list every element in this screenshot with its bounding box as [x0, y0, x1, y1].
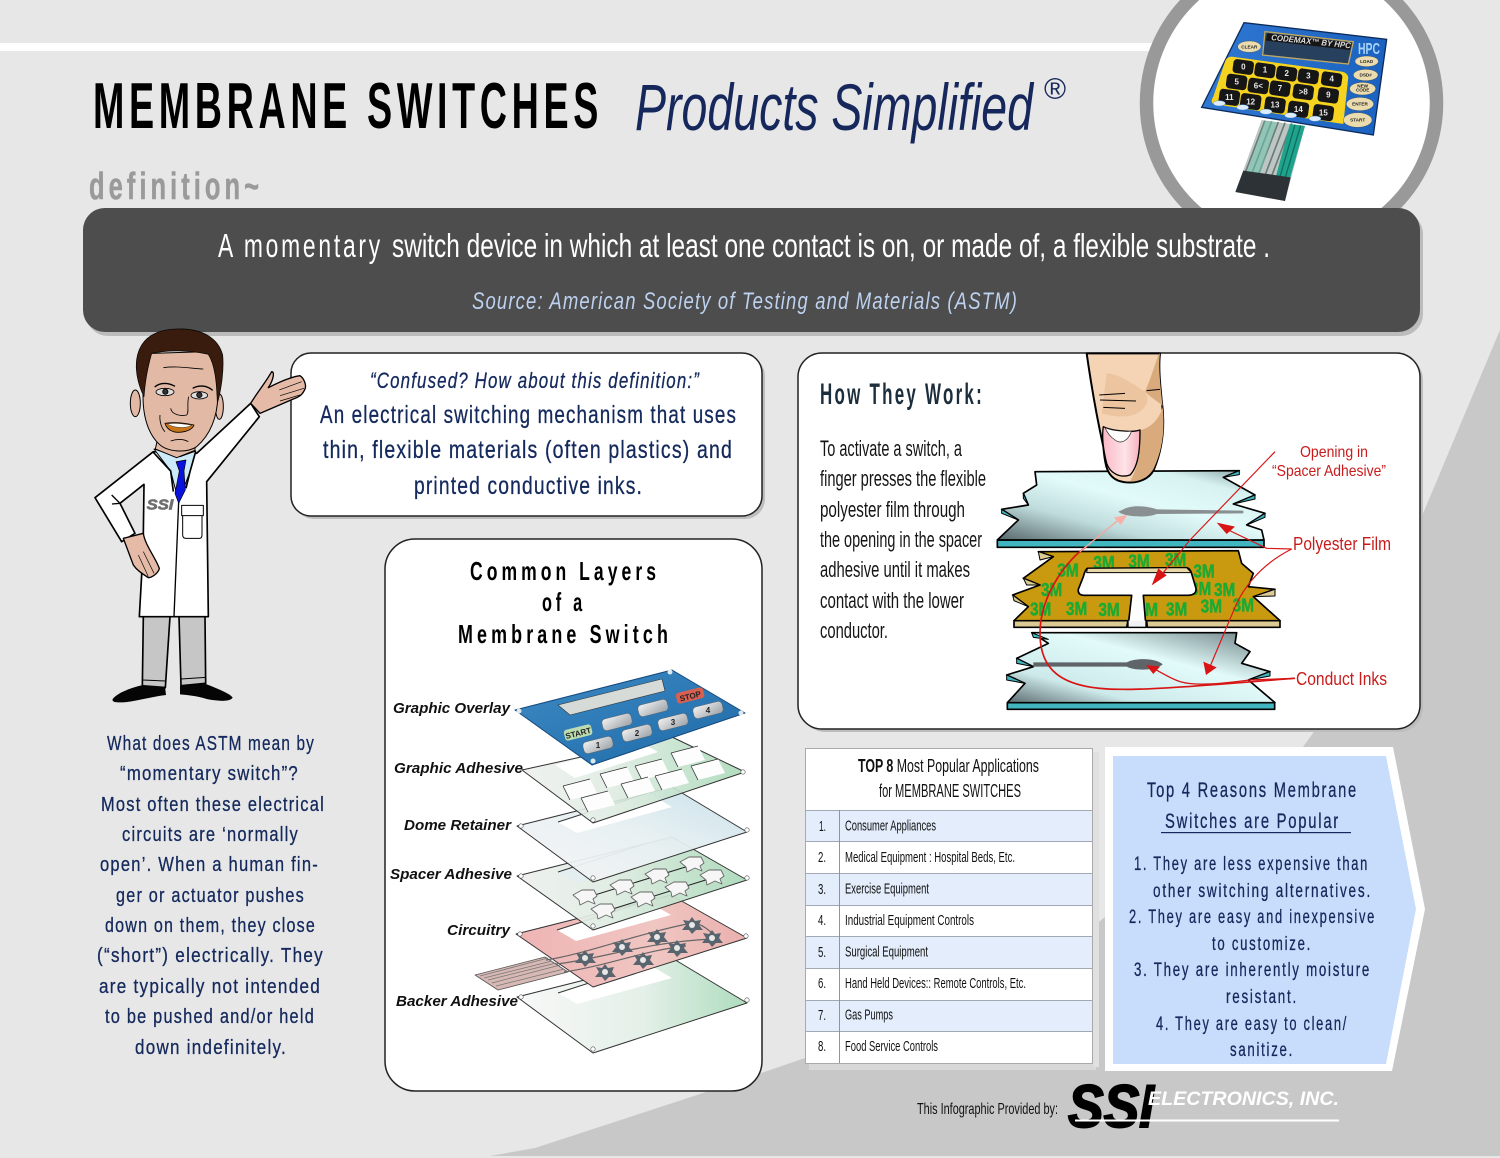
- footer credit: This Infographic Provided by:: [917, 1101, 1058, 1118]
- 3M repeated print: 3M: [1128, 550, 1150, 571]
- how they work body: the opening in the spacer: [820, 527, 982, 552]
- keypad membrane switch illustration: CLEAR: [1241, 44, 1258, 49]
- definition banner: [83, 208, 1423, 336]
- top white stripe: [0, 43, 1160, 51]
- 3M repeated print: 3M: [1098, 599, 1120, 620]
- SSI logo: SSI: [1068, 1073, 1155, 1140]
- layer: backer adhesive: [517, 958, 749, 1053]
- layers heading: Common Layers: [470, 556, 660, 586]
- callout body: [320, 401, 737, 500]
- 3M repeated print: 3M: [1190, 578, 1211, 599]
- reasons list: resistant.: [1226, 987, 1298, 1008]
- panel: top 4 reasons: [1105, 747, 1425, 1071]
- hands: [123, 372, 306, 578]
- table text: Exercise Equipment: [845, 880, 930, 898]
- definition text: [218, 227, 1270, 264]
- table text: 2.: [818, 849, 826, 866]
- panel: how they work: [798, 353, 1423, 732]
- reasons heading: [1147, 779, 1358, 833]
- layer: graphic overlay: [515, 670, 745, 765]
- 3M repeated print: 3M: [1165, 549, 1186, 570]
- callout body: thin, flexible materials (often plastics) and: [323, 436, 733, 464]
- coat pocket: [182, 505, 203, 538]
- background diagonal gray band: [490, 330, 1500, 1156]
- keypad membrane switch illustration: 4: [1329, 75, 1334, 84]
- 3M repeated print: 3M: [1193, 560, 1215, 581]
- red leader arrows: [1040, 452, 1295, 689]
- left explanatory text: “momentary switch”?: [120, 763, 299, 785]
- lab coat: [95, 403, 259, 617]
- keypad membrane switch illustration: NEW: [1357, 84, 1369, 89]
- necktie: [175, 460, 186, 503]
- table: top 8 applications: [806, 748, 1099, 1070]
- layers heading: [458, 556, 672, 649]
- lower polyester film: [1007, 633, 1275, 709]
- 3M repeated print: 3M: [1166, 598, 1187, 619]
- layer labels: Graphic Adhesive: [394, 760, 523, 777]
- reasons list: other switching alternatives.: [1153, 881, 1372, 902]
- spacer domes: [573, 857, 724, 919]
- reasons list: [1129, 854, 1376, 1061]
- layer: graphic overlay: 3: [671, 718, 676, 727]
- diagram labels: “Spacer Adhesive”: [1272, 463, 1386, 480]
- layer: dome retainer: [517, 787, 749, 882]
- how they work body: To activate a switch, a: [820, 436, 962, 461]
- table text: Medical Equipment : Hospital Beds, Etc.: [845, 849, 1015, 866]
- table text: Industrial Equipment Controls: [845, 912, 974, 929]
- 3M repeated print: [1030, 552, 1254, 616]
- layer: spacer adhesive: [517, 837, 749, 930]
- reasons list: to customize.: [1212, 934, 1312, 955]
- left explanatory text: down on them, they close: [105, 915, 316, 937]
- callout panel: simple definition: [291, 353, 765, 519]
- keypad membrane switch illustration: 3: [1306, 72, 1311, 81]
- diagram labels: [1272, 444, 1391, 689]
- source text: Source: American Society of Testing and Materials (ASTM): [472, 288, 1018, 315]
- facial features: [155, 367, 213, 442]
- switch diagram: [997, 353, 1295, 709]
- reasons heading: Switches are Popular: [1165, 810, 1340, 833]
- layers heading: Membrane Switch: [458, 619, 672, 649]
- keypad membrane switch illustration: [1202, 23, 1387, 201]
- keypad membrane switch illustration: 12: [1246, 97, 1256, 106]
- ears: [130, 390, 140, 417]
- spacer opening: [1078, 568, 1196, 627]
- fingernail: [1103, 427, 1140, 476]
- keypad membrane switch illustration: 7: [1278, 84, 1283, 93]
- 3M repeated print: 3M: [1233, 595, 1254, 616]
- layer labels: Circuitry: [447, 922, 511, 939]
- left explanatory text: What does ASTM mean by: [107, 733, 315, 755]
- keypad membrane switch illustration: 5: [1234, 77, 1239, 86]
- keypad membrane switch illustration: 2: [1284, 69, 1289, 78]
- table text: Consumer Appliances: [845, 818, 936, 834]
- table text: 3.: [818, 881, 826, 898]
- keypad membrane switch illustration: 14: [1294, 105, 1303, 114]
- shirt collar: [154, 449, 196, 502]
- top polyester film: [997, 471, 1265, 547]
- left explanatory text: (“short”) electrically. They: [97, 945, 324, 967]
- left explanatory text: are typically not intended: [99, 976, 321, 998]
- company name: ELECTRONICS, INC.: [1148, 1089, 1339, 1110]
- panel: common layers: [385, 539, 762, 1091]
- reasons list: sanitize.: [1230, 1040, 1294, 1061]
- table text: 5.: [818, 944, 826, 961]
- reasons list: 1. They are less expensive than: [1134, 854, 1369, 875]
- 3M repeated print: 3M: [1030, 598, 1051, 619]
- keypad membrane switch illustration: 11: [1225, 93, 1234, 102]
- trousers: [142, 617, 206, 688]
- layer labels: [390, 700, 523, 1010]
- layer: graphic overlay: 1: [596, 741, 601, 750]
- table text: Surgical Equipment: [845, 944, 929, 960]
- footer credit: [917, 1073, 1339, 1140]
- keypad membrane switch illustration: >8: [1299, 87, 1308, 96]
- keypad membrane switch illustration: START: [1350, 118, 1365, 123]
- how they work body: polyester film through: [820, 497, 965, 522]
- left explanatory text: Most often these electrical: [101, 794, 325, 816]
- how they work body: [820, 436, 986, 643]
- table text: 6.: [818, 975, 826, 992]
- 3M repeated print: 3M: [1201, 596, 1222, 617]
- subtitle: Products Simplified: [635, 70, 1035, 144]
- table text: 1.: [819, 818, 826, 835]
- keypad membrane switch illustration: DSD#: [1359, 73, 1372, 78]
- layer labels: Graphic Overlay: [393, 700, 511, 717]
- table text: Hand Held Devices:: Remote Controls, Etc.: [845, 975, 1026, 992]
- coat logo: SSI: [147, 497, 174, 513]
- left explanatory text: open’. When a human fin-: [100, 854, 319, 876]
- keypad membrane switch illustration: 15: [1319, 108, 1328, 117]
- reasons list: 2. They are easy and inexpensive: [1129, 907, 1376, 928]
- how they work heading: How They Work:: [820, 378, 984, 411]
- face: [143, 352, 218, 451]
- keypad keys: [1218, 59, 1343, 122]
- hair: [136, 329, 223, 403]
- table rows: [806, 810, 1092, 1063]
- finger: [1087, 353, 1164, 482]
- keypad membrane switch illustration: ENTER: [1352, 102, 1369, 107]
- reasons list: 4. They are easy to clean/: [1156, 1014, 1348, 1035]
- definition text: A momentary: [218, 227, 383, 264]
- table text: Gas Pumps: [845, 1006, 893, 1024]
- left explanatory text: circuits are ‘normally: [122, 824, 299, 846]
- layer: circuitry: [475, 895, 748, 990]
- keypad membrane switch illustration: 0: [1241, 62, 1246, 71]
- callout quote: “Confused? How about this definition:”: [370, 368, 700, 393]
- 3M repeated print: 3M: [1066, 598, 1087, 619]
- how they work body: adhesive until it makes: [820, 557, 970, 582]
- 3M repeated print: 3M: [1041, 579, 1062, 600]
- keypad membrane switch illustration: HPC: [1358, 41, 1380, 58]
- how they work body: finger presses the flexible: [820, 466, 986, 491]
- keypad membrane switch illustration: LOAD: [1360, 59, 1374, 64]
- how they work body: contact with the lower: [820, 588, 964, 613]
- table heading: TOP 8 Most Popular Applications: [858, 756, 1039, 776]
- 3M repeated print: 3M: [1093, 552, 1115, 573]
- shoes: [113, 684, 233, 702]
- cartoon engineer pointing: [95, 329, 306, 702]
- left explanatory text: ger or actuator pushes: [116, 885, 305, 907]
- table text: [818, 818, 1026, 1055]
- definition label: definition~: [89, 166, 263, 208]
- layer: graphic overlay: 4: [706, 706, 711, 715]
- registered mark: ®: [1044, 73, 1066, 106]
- layer: graphic overlay: START: [565, 726, 592, 741]
- 3M repeated print: 3M: [1137, 599, 1158, 620]
- diagram labels: Conduct Inks: [1296, 669, 1387, 689]
- layer: graphic overlay: 2: [635, 729, 640, 738]
- title: MEMBRANE SWITCHES: [93, 69, 603, 142]
- layer labels: Backer Adhesive: [396, 993, 518, 1010]
- left explanatory text: to be pushed and/or held: [105, 1006, 315, 1028]
- how they work body: conductor.: [820, 618, 888, 643]
- left explanatory text: down indefinitely.: [135, 1037, 287, 1059]
- layer: graphic overlay: STOP: [679, 689, 703, 703]
- spacer adhesive sheet: [1013, 549, 1280, 627]
- layers heading: of a: [542, 587, 586, 617]
- neck: [155, 438, 195, 458]
- callout body: An electrical switching mechanism that uses: [320, 401, 737, 429]
- table text: 8.: [818, 1038, 826, 1055]
- diagram labels: Opening in: [1300, 444, 1368, 461]
- 3M repeated print: 3M: [1214, 579, 1235, 600]
- left explanatory text: [97, 733, 325, 1059]
- layer labels: Dome Retainer: [404, 817, 512, 834]
- keypad membrane switch illustration: CODEMAX™ BY HPC: [1271, 32, 1352, 50]
- diagram labels: Polyester Film: [1293, 534, 1391, 554]
- keypad membrane switch illustration: 1: [1263, 66, 1268, 75]
- keypad membrane switch illustration: 6<: [1254, 81, 1263, 90]
- layer: graphic adhesive: [522, 737, 745, 823]
- 3M repeated print: 3M: [1057, 560, 1079, 581]
- callout body: printed conductive inks.: [414, 472, 643, 500]
- keypad membrane switch illustration: CODE: [1356, 88, 1369, 93]
- product circle with keypad: [1146, 0, 1436, 248]
- table text: 7.: [818, 1007, 826, 1024]
- keypad membrane switch illustration: 13: [1271, 101, 1280, 110]
- circuit contact stars: [575, 917, 723, 981]
- reasons list: 3. They are inherently moisture: [1134, 960, 1371, 981]
- keypad membrane switch illustration: 9: [1326, 91, 1331, 100]
- table text: Food Service Controls: [845, 1038, 938, 1055]
- layer labels: Spacer Adhesive: [390, 866, 512, 883]
- table text: 4.: [818, 912, 826, 929]
- table: top 8 applications: for MEMBRANE SWITCHES: [879, 781, 1021, 801]
- reasons heading: Top 4 Reasons Membrane: [1147, 779, 1358, 802]
